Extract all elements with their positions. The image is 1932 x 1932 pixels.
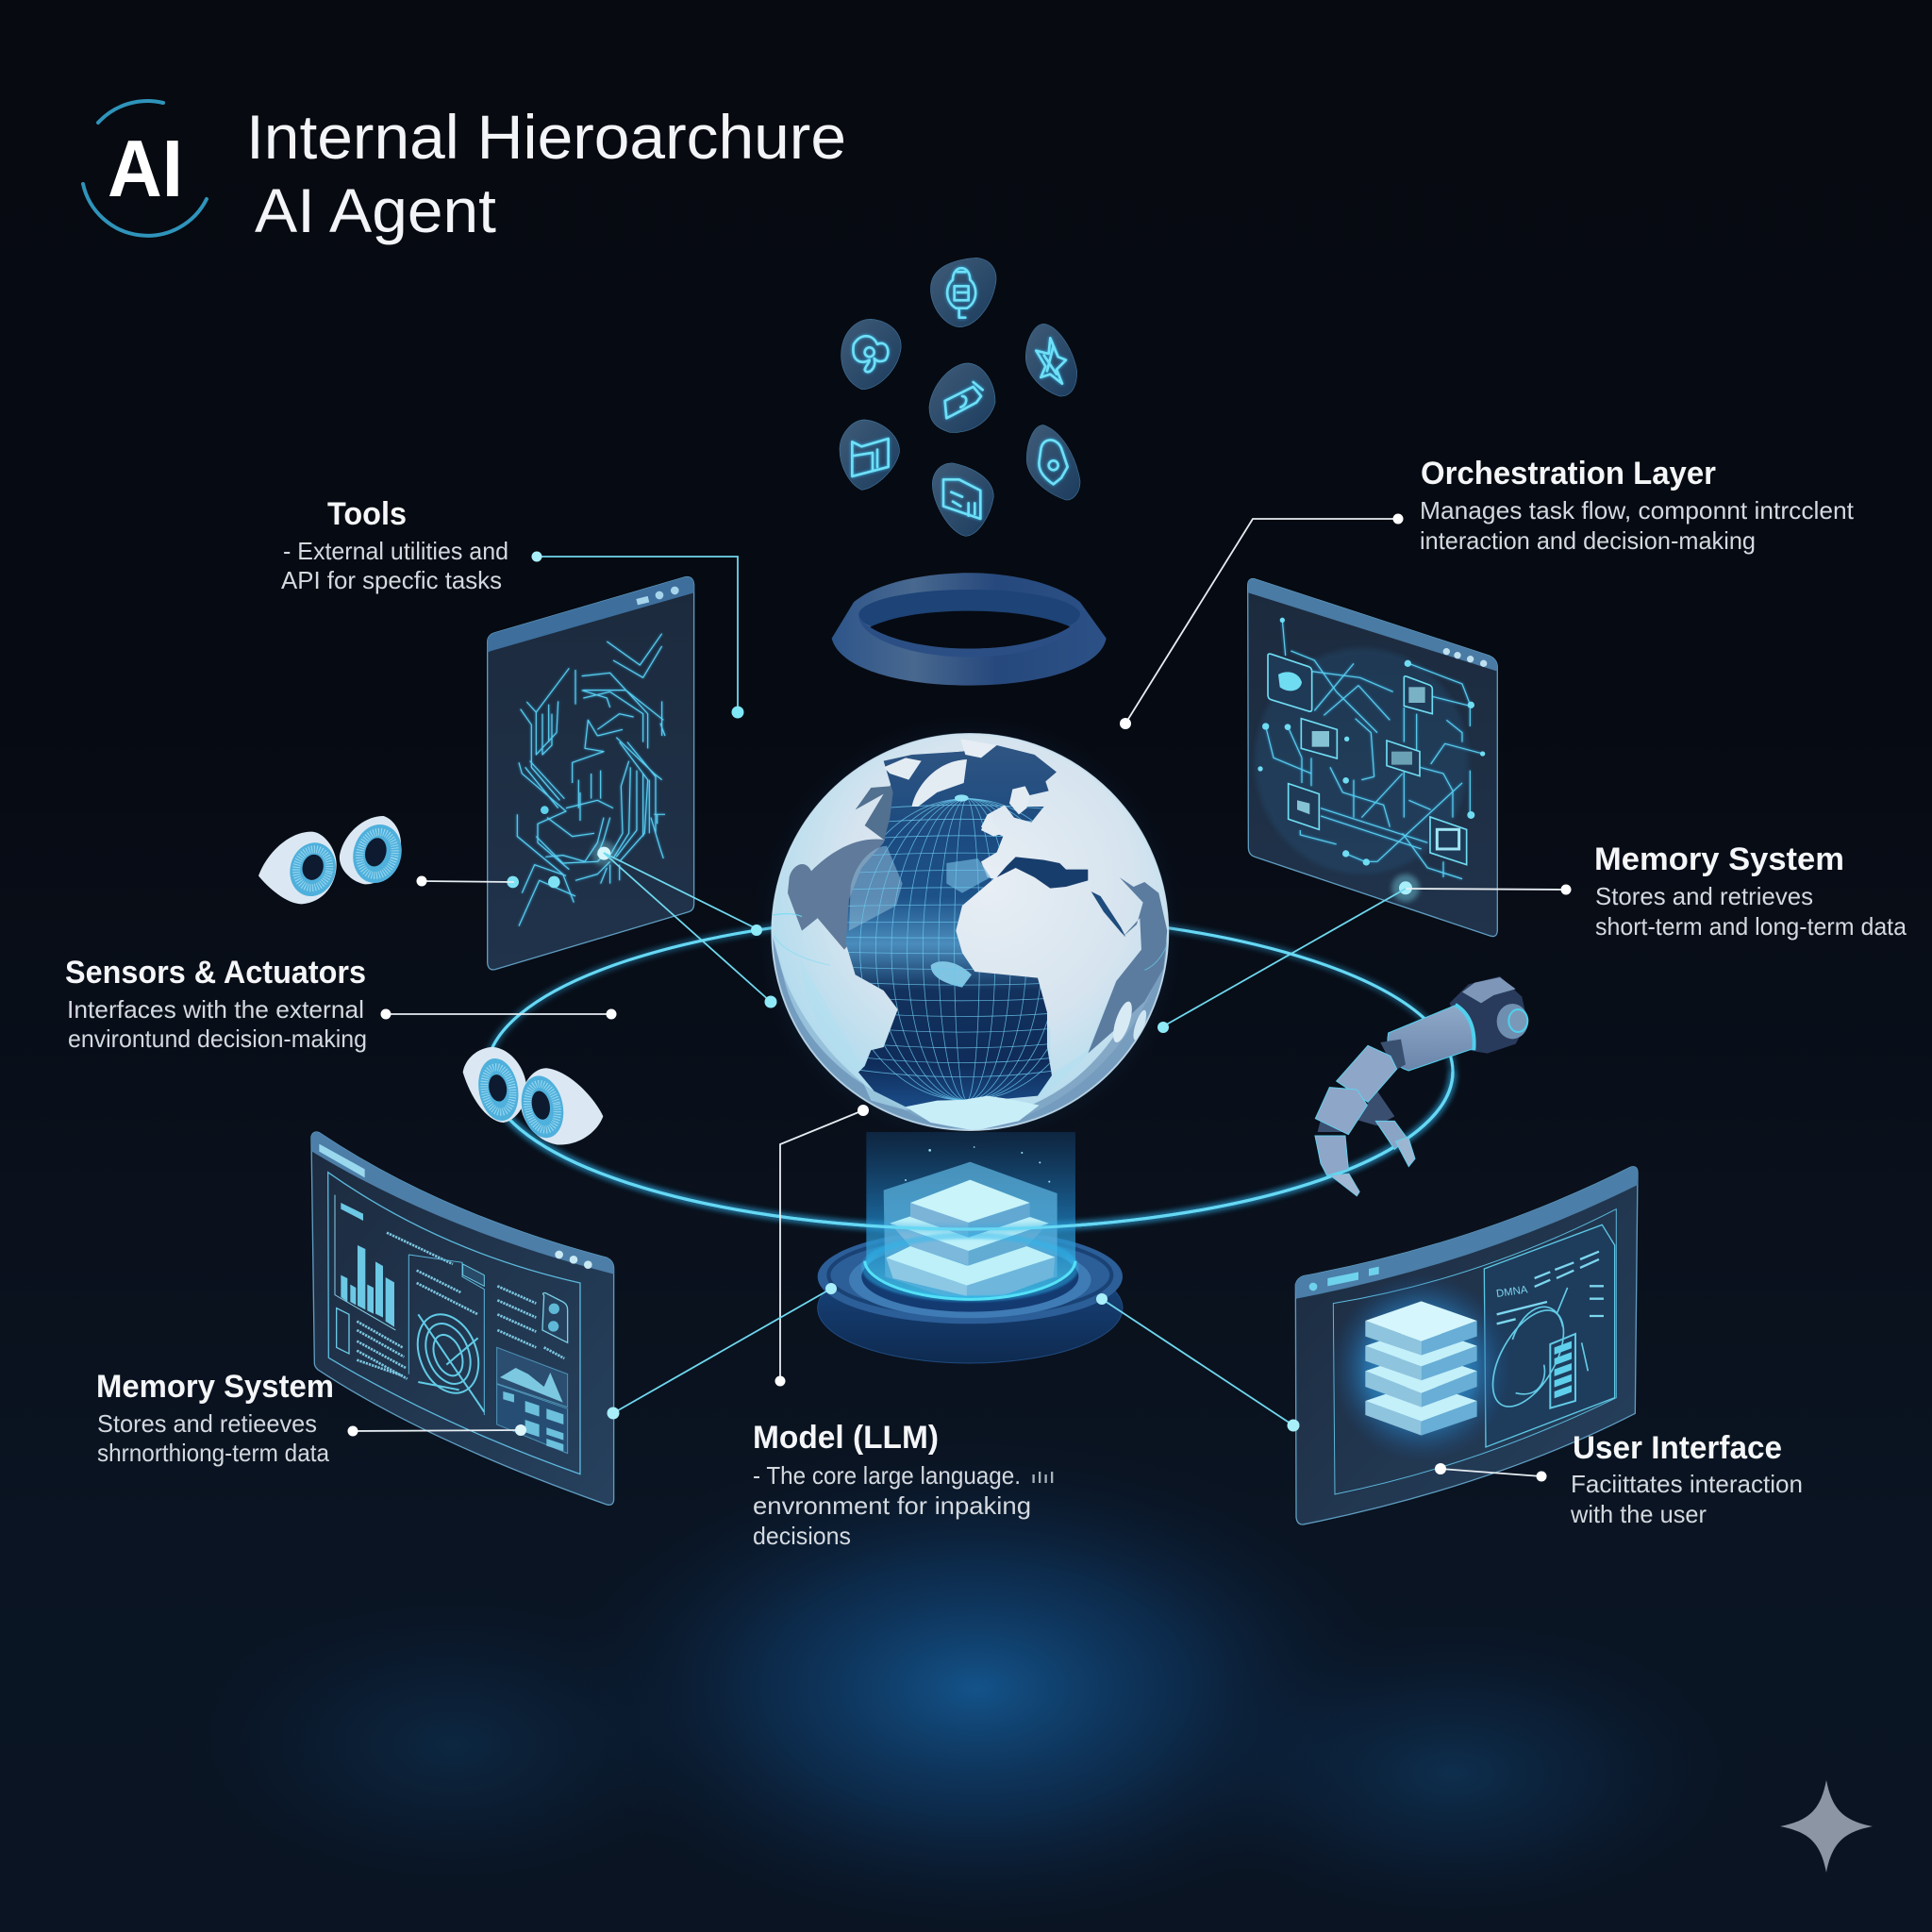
network lines (1266, 620, 1483, 879)
red sea and indian ocean (1091, 891, 1125, 937)
hologram beam (866, 1132, 1075, 1299)
dashboard bar chart (341, 1203, 394, 1327)
text: sensors and actuators: Sensors & Actuators (65, 955, 366, 991)
glass rim (772, 734, 1168, 1130)
callout: base to left screen (608, 1283, 837, 1419)
text: orchestration layer: Manages task flow, componnt intrcclent (1420, 496, 1855, 525)
text: memory system right (1594, 841, 1907, 941)
callout: sensors leader (381, 1009, 617, 1019)
panel: user interface screen: DMNA (1495, 1284, 1529, 1300)
background glow (170, 1434, 1755, 1932)
title: AI Agent (255, 175, 496, 245)
text: sensors and actuators (65, 955, 367, 1053)
icon: robot arm (1315, 976, 1528, 1196)
ui inner frame (1333, 1209, 1616, 1494)
callout: tools leader (532, 551, 743, 719)
title: Internal Hieroarchure (246, 102, 846, 172)
left ocean tint (788, 840, 885, 949)
icon: tool stone center (929, 363, 995, 432)
text: tools: Tools (327, 496, 407, 532)
floating tool icons (840, 258, 1080, 536)
text: memory system left: Stores and retieeves (97, 1409, 317, 1438)
text: model llm: envronment for inpaking (753, 1491, 1031, 1520)
mediterranean (997, 857, 1088, 889)
callout: memory system right leader (1158, 885, 1572, 1033)
main ocean (846, 745, 1057, 1107)
map grid (846, 798, 1051, 1100)
callout: model leader (775, 1105, 869, 1387)
text: memory system right: Stores and retrieves (1595, 882, 1813, 910)
text: model llm (753, 1420, 1055, 1550)
ring holder (832, 573, 1107, 686)
text: model llm: - The core large language. (753, 1461, 1021, 1490)
panel: orchestration network screen (1248, 579, 1497, 937)
callout: sensors eye leader (417, 875, 514, 887)
text: model llm: ılıl (1030, 1469, 1055, 1487)
callout: base to right screen (1096, 1293, 1300, 1432)
text: sensors and actuators: Interfaces with the external (67, 995, 364, 1024)
panel: left dashboard screen (311, 1132, 614, 1505)
ui gauge (1478, 1288, 1588, 1418)
text: memory system left: shrnorthiong-term data (97, 1439, 329, 1467)
text: user interface: User Interface (1573, 1430, 1782, 1466)
icon: tool stone lower left (840, 420, 899, 490)
text: model llm: Model (LLM) (753, 1420, 939, 1456)
panel: tools circuit screen (488, 577, 694, 970)
base pedestal (818, 1132, 1123, 1363)
panel: user interface screen (1295, 1167, 1638, 1524)
callout: orchestration leader (1120, 513, 1404, 729)
dashboard inner frame (328, 1173, 580, 1474)
text: model llm: decisions (753, 1522, 851, 1550)
text: user interface: with the user (1570, 1500, 1707, 1528)
text: memory system left: Memory System (96, 1369, 334, 1405)
glass lower rim (772, 932, 1168, 1139)
title (246, 102, 846, 245)
icon: tool stone bottom center (932, 463, 993, 536)
data layer cube (884, 1162, 1058, 1296)
text: orchestration layer: Orchestration Layer (1421, 456, 1716, 491)
icon: eyes upper (258, 816, 408, 904)
ui data stack (1365, 1301, 1477, 1436)
text: sensors and actuators: environtund decision-making (68, 1024, 367, 1053)
text: user interface: Faciittates interaction (1571, 1470, 1803, 1498)
text: memory system left (96, 1369, 334, 1467)
callout: user interface leader (1435, 1463, 1547, 1481)
text: orchestration layer (1420, 456, 1855, 555)
dashboard radar emblem (407, 1306, 490, 1412)
icon: sparkle watermark (1780, 1780, 1873, 1873)
text: user interface (1570, 1430, 1803, 1528)
logo (83, 101, 207, 236)
text: tools (281, 496, 508, 594)
icon: eyes lower (463, 1047, 603, 1144)
network nodes (1268, 654, 1467, 865)
icon: tool stone lower right (1026, 425, 1080, 500)
text: memory system right: Memory System (1594, 841, 1844, 877)
icon: tool stone top (931, 258, 996, 327)
text: tools: - External utilities and (283, 537, 508, 565)
text: tools: API for specfic tasks (281, 566, 502, 594)
globe (762, 732, 1181, 1131)
callout: tools panel to globe leaders (604, 853, 777, 1008)
icon: tool stone upper right (1025, 324, 1077, 396)
callout: memory system left leader (347, 1424, 526, 1436)
orbit ring front (487, 1072, 1453, 1229)
logo: AI (108, 125, 183, 214)
text: orchestration layer: interaction and decision-making (1420, 526, 1756, 555)
text: memory system right: short-term and long-term data (1595, 912, 1907, 941)
orbit ring back (487, 914, 1453, 1229)
antarctica (906, 1096, 1040, 1131)
dashboard text rows (357, 1233, 564, 1379)
icon: tool stone upper left (841, 319, 901, 390)
land details (912, 759, 967, 807)
circuit traces (517, 634, 665, 926)
